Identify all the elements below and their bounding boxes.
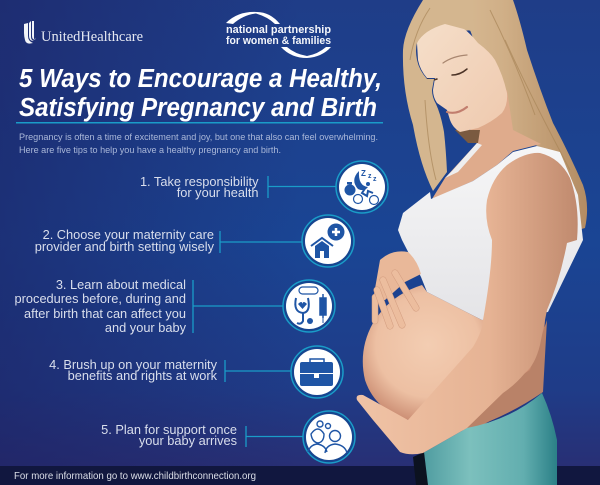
- woman photo: [357, 0, 587, 485]
- icon: sleep, nutrition, exercise: Z: [361, 169, 366, 178]
- logo: National Partnership for Women & Families: for women & families: [226, 35, 331, 47]
- tip 3 text: and your baby: [105, 320, 187, 335]
- tip 2 text: provider and birth setting wisely: [35, 239, 215, 254]
- logo: UnitedHealthcare: UnitedHealthcare: [41, 29, 143, 45]
- logo: National Partnership for Women & Families: [226, 12, 331, 58]
- tip 4 text: [49, 357, 218, 383]
- footer bar: [0, 466, 600, 485]
- icon: stethoscope, bandage and syringe: [283, 280, 335, 332]
- arm: [357, 153, 578, 454]
- tip 5 text: your baby arrives: [139, 433, 237, 448]
- intro text: Pregnancy is often a time of excitement and joy, but one that also can feel overwhelming.: [19, 131, 378, 142]
- icon: sleep, nutrition, exercise: [336, 161, 388, 213]
- intro text: [19, 131, 378, 155]
- skirt: [423, 393, 557, 485]
- tip 3 text: 3. Learn about medical: [56, 277, 186, 292]
- icon: briefcase: [291, 346, 343, 398]
- title: Satisfying Pregnancy and Birth: [19, 94, 377, 122]
- tip 3: [15, 277, 335, 335]
- icon: sleep, nutrition, exercise: z: [368, 173, 372, 180]
- icon: house and medical cross: [302, 215, 354, 267]
- tip 2 text: [35, 227, 215, 254]
- tip 4 text: 4. Brush up on your maternity: [49, 357, 218, 372]
- tank top: [398, 146, 583, 320]
- tip 3 text: procedures before, during and: [15, 291, 186, 306]
- tip 3 text: [15, 277, 187, 335]
- tip 4: [49, 346, 343, 398]
- intro text: Here are five tips to help you have a healthy pregnancy and birth.: [19, 144, 281, 155]
- tip 5: [101, 411, 355, 463]
- dark garment edge: [413, 452, 428, 485]
- face: [417, 22, 507, 132]
- tip 5 text: 5. Plan for support once: [101, 422, 237, 437]
- neck and chest: [432, 90, 541, 199]
- tip 5 text: [101, 422, 237, 448]
- left hair lock: [403, 0, 475, 191]
- tip 1 text: 1. Take responsibility: [140, 174, 259, 189]
- right hair: [420, 0, 587, 230]
- tip 3 text: after birth that can affect you: [24, 306, 186, 321]
- tip 1 text: for your health: [177, 185, 258, 200]
- lower torso shade: [440, 320, 547, 430]
- footer text: For more information go to www.childbirthconnection.org: [14, 470, 256, 482]
- eyes, brow and lips: [428, 55, 467, 113]
- shadow under chin: [455, 130, 480, 143]
- logo: UnitedHealthcare: [24, 21, 143, 45]
- logo: National Partnership for Women & Families: national partnership: [226, 24, 331, 36]
- title: 5 Ways to Encourage a Healthy,: [19, 65, 382, 93]
- hair strands: [410, 8, 570, 180]
- tip 2: [35, 215, 354, 267]
- belly: [363, 285, 545, 432]
- tip 1 text: [140, 174, 259, 200]
- icon: family: [303, 411, 355, 463]
- tip 1: [140, 161, 388, 213]
- tip 2 text: 2. Choose your maternity care: [43, 227, 214, 242]
- far strap: [445, 143, 482, 178]
- hand on belly: [373, 251, 421, 326]
- title: [19, 65, 382, 122]
- icon: sleep, nutrition, exercise: z: [373, 176, 377, 183]
- tip 4 text: benefits and rights at work: [68, 368, 218, 383]
